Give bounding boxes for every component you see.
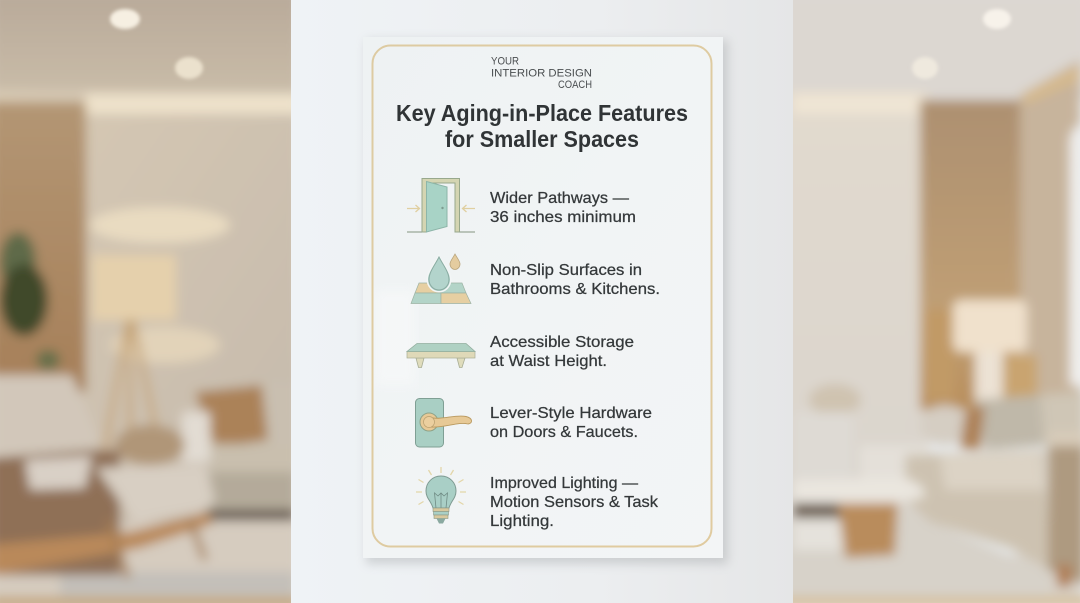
logo: Your Interior Design Coach: COACH — [558, 79, 592, 91]
logo: Your Interior Design Coach: YOUR — [491, 56, 519, 68]
ceiling spotlights — [110, 9, 1011, 79]
text: improved lighting: Motion Sensors & Task — [490, 494, 659, 511]
text: accessible storage — [490, 334, 634, 370]
background photo: blurred living room, left side — [0, 0, 300, 603]
icon: light bulb with rays — [416, 467, 466, 524]
text: improved lighting: Improved Lighting — — [490, 475, 638, 492]
text: non-slip surfaces — [490, 262, 660, 298]
icon: wall shelf — [407, 344, 475, 368]
text: lever-style hardware — [490, 405, 652, 441]
text: wider pathways — [490, 190, 636, 226]
text: non-slip surfaces: Non-Slip Surfaces in — [490, 262, 642, 279]
text: lever-style hardware: Lever-Style Hardware — [490, 405, 652, 422]
icon: door with width arrows — [407, 178, 475, 232]
background photo: blurred living room, right side — [780, 0, 1080, 603]
central white wall — [291, 0, 793, 603]
panel: wall sign — [363, 37, 728, 564]
text: improved lighting: Lighting. — [490, 513, 554, 530]
title: for Smaller Spaces — [445, 126, 639, 152]
title: Key Aging-in-Place Features — [396, 100, 688, 126]
logo: Your Interior Design Coach — [491, 56, 592, 91]
icon: water drops on tile floor — [411, 254, 471, 304]
text: wider pathways: Wider Pathways — — [490, 190, 629, 207]
text: improved lighting — [490, 475, 659, 530]
title — [396, 100, 688, 152]
gold rounded border — [372, 46, 712, 546]
text: non-slip surfaces: Bathrooms & Kitchens. — [490, 281, 660, 298]
text: wider pathways: 36 inches minimum — [490, 209, 636, 226]
icon: lever door handle — [416, 398, 472, 447]
text: accessible storage: Accessible Storage — [490, 334, 634, 351]
text: lever-style hardware: on Doors & Faucets. — [490, 424, 638, 441]
text: accessible storage: at Waist Height. — [490, 353, 607, 370]
logo: Your Interior Design Coach: INTERIOR DESIGN — [491, 68, 592, 80]
